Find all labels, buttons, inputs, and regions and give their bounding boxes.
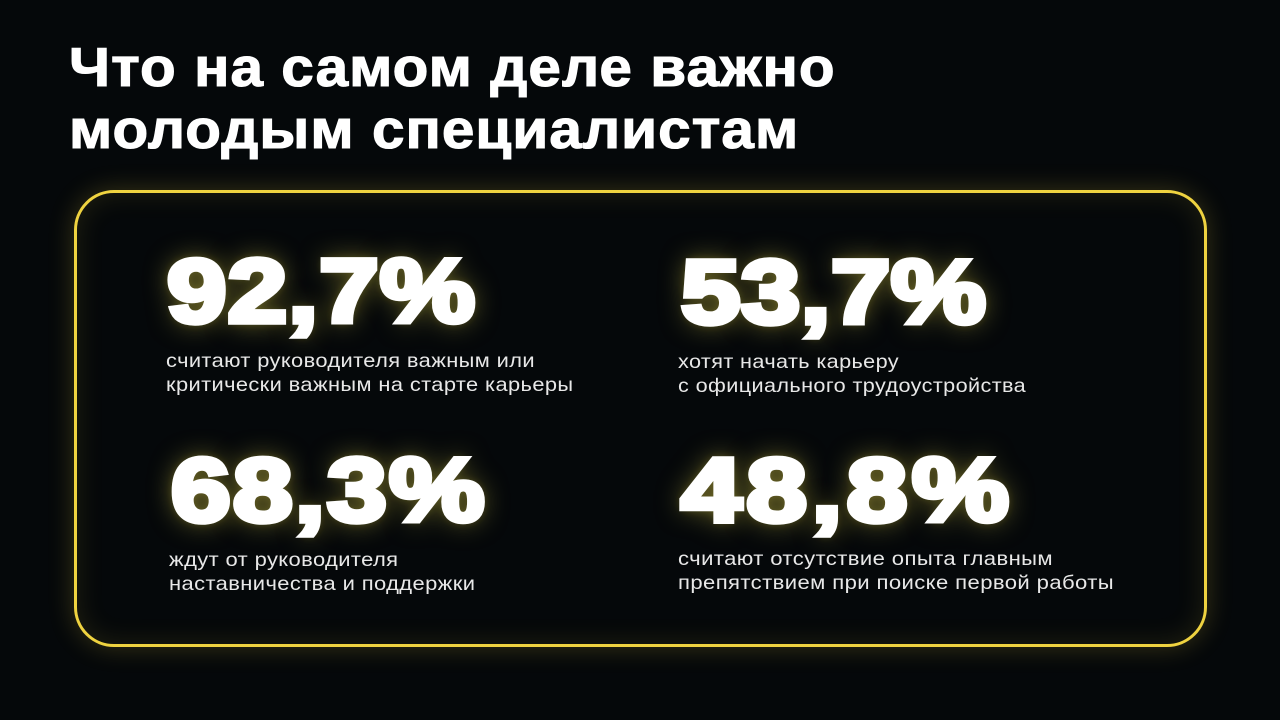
caption: 48,8%: препятствием при поиске первой работы bbox=[678, 572, 1114, 594]
stat: 48,8%: 48,8% bbox=[681, 441, 1014, 541]
panel: statistics frame bbox=[74, 190, 1207, 647]
caption: 92,7% bbox=[166, 350, 573, 396]
stat: 68,3%: 68,3% bbox=[171, 441, 487, 541]
caption: 68,3%: наставничества и поддержки bbox=[169, 573, 475, 595]
caption: 53,7%: хотят начать карьеру bbox=[678, 351, 899, 373]
stat: 53,7%: 53,7% bbox=[681, 243, 986, 343]
title bbox=[69, 36, 836, 160]
title: Что на самом деле важно bbox=[69, 36, 836, 98]
caption: 68,3%: ждут от руководителя bbox=[169, 549, 398, 571]
title: молодым специалистам bbox=[69, 98, 799, 160]
caption: 48,8%: считают отсутствие опыта главным bbox=[678, 548, 1053, 570]
caption: 68,3% bbox=[169, 549, 475, 595]
caption: 92,7%: считают руководителя важным или bbox=[166, 350, 535, 372]
caption: 48,8% bbox=[678, 548, 1114, 594]
caption: 92,7%: критически важным на старте карьеры bbox=[166, 374, 573, 396]
caption: 53,7%: с официального трудоустройства bbox=[678, 375, 1026, 397]
stat: 92,7%: 92,7% bbox=[167, 242, 476, 342]
caption: 53,7% bbox=[678, 351, 1026, 397]
